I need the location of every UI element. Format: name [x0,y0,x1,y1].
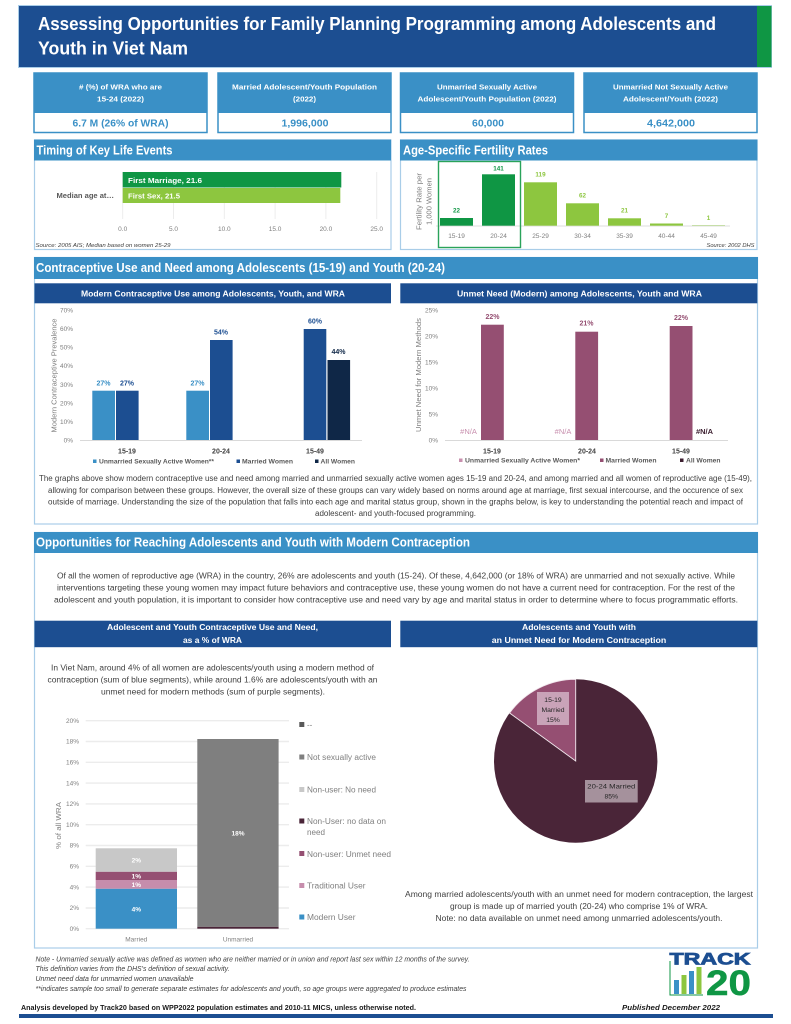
bar chart: fertility rates: 35-39 [616,233,633,240]
label: 15-19 married: Married [541,707,565,714]
panel: timing of key life events [34,140,391,250]
legend: stacked chart: Non-user: Unmet need [307,850,391,859]
chart: modern contraceptive use: Married Women [242,458,293,466]
chart: stacked use and need as % of WRA: contraception (sum of blue segments), while around 1.6% are adolescents/youth with an [48,676,378,684]
chart: modern contraceptive use: Modern Contraceptive Prevalence [50,319,58,432]
chart: modern contraceptive use: 60% [60,326,73,333]
chart: modern contraceptive use: 70% [60,308,73,314]
chart: unmet need [400,283,757,464]
chart: stacked use and need as % of WRA: 12% [66,801,79,808]
text block: graph explanation: allowing for comparison between these groups. However, the overall size of these groups can vary widely based on norms around age at marriage, first sexual intercourse, and the occurence of sex [48,486,743,495]
bar chart: fertility rates: 21 [621,208,628,214]
legend: stacked chart: need [307,828,325,837]
stat card: unmarried not sexually active [584,73,757,132]
chart: unmet need pie: Among married adolescents/youth with an unmet need for modern contraception, the largest [405,890,754,899]
text block: opportunities intro: interventions targeting these young women may impact future behaviors and contraceptive use, these young women do not have a current need for contraception. For the rest of the [57,584,736,592]
chart: unmet need: #N/A [555,427,571,436]
footnotes [36,956,470,993]
label: 15-19 married: 15% [546,717,560,724]
bar chart: median age: First Sex, 21.5 [128,192,181,200]
chart: unmet need: #N/A [460,427,477,436]
chart: modern contraceptive use: 15-49 [306,448,324,456]
chart: modern contraceptive use: Modern Contraceptive Use among Adolescents, Youth, and WRA [81,290,345,298]
legend: stacked chart: -- [307,720,313,730]
stat card: unmarried sexually active: Unmarried Sexually Active [437,82,537,92]
chart: modern contraceptive use: 0% [64,438,73,444]
label: 15-19 married: 15-19 [544,697,562,704]
logo: Track20 [670,950,751,1003]
chart: unmet need: 21% [579,320,594,328]
chart: stacked use and need as % of WRA: 16% [66,760,79,766]
text block: opportunities intro [54,572,738,604]
chart: unmet need pie: Note: no data available on unmet need among unmarried adolescents/youth. [436,914,722,923]
title banner [18,6,772,68]
bar chart: median age: Median age at… [56,191,114,200]
chart: unmet need: 0% [429,438,438,444]
bar chart: fertility rates: Fertility Rate per [416,172,424,230]
stat card: married population: (2022) [293,94,316,104]
chart: stacked use and need as % of WRA: In Viet Nam, around 4% of all women are adolescents/youth using a modern method of [51,664,375,672]
chart: modern contraceptive use: 40% [60,363,73,370]
text block: graph explanation: outside of marriage. Understanding the size of the population that falls into each age and marital status group, shown in the graphs below, is key to understanding the potential reach and impact of [48,498,744,506]
footnotes: This definition varies from the DHS's definition of sexual activity. [36,966,230,973]
chart: unmet need pie: group is made up of married youth (20-24) who comprise 1% of WRA. [450,902,708,911]
chart: stacked use and need as % of WRA: 2% [70,905,79,912]
bar chart: fertility rates: 62 [579,192,586,200]
bar chart: fertility rates: 1 [707,215,711,222]
bar chart: median age [56,172,383,233]
chart: unmet need: Unmarried Sexually Active Women* [465,458,580,464]
stat card: married population: 1,996,000 [282,118,329,130]
source note: Source: 2002 DHS [706,243,755,249]
chart: unmet need: 15-49 [672,448,690,456]
bar chart: fertility rates: 141 [493,166,504,172]
chart: stacked use and need as % of WRA: 14% [66,780,79,787]
bar chart: fertility rates: 20-24 [490,233,507,240]
bar chart: median age: First Marriage, 21.6 [128,176,202,185]
chart: stacked use and need as % of WRA [34,621,391,944]
panel: age-specific fertility rates [400,140,758,250]
chart: modern contraceptive use: 27% [96,380,111,388]
bar chart: fertility rates: 15-19 [448,233,465,240]
chart: unmet need: 22% [485,314,500,321]
heading: timing of key life events: Timing of Key Life Events [36,144,173,158]
stat card: married population: Married Adolescent/Youth Population [232,82,377,92]
bar chart: median age: 10.0 [218,226,231,233]
chart: unmet need: 25% [425,308,438,314]
chart: stacked use and need as % of WRA: % of all WRA [54,802,63,849]
footer bar [19,1014,773,1018]
chart: stacked use and need as % of WRA: 1% [132,874,141,880]
chart: modern contraceptive use: 27% [190,380,205,388]
title banner: Assessing Opportunities for Family Planning Programming among Adolescents and [38,13,716,34]
chart: modern contraceptive use: All Women [320,458,355,466]
legend: stacked chart: Non-user: No need [307,786,376,794]
bar chart: median age: 0.0 [118,226,128,233]
chart: stacked use and need as % of WRA: 1% [132,882,141,889]
stat card: unmarried sexually active: Adolescent/Youth Population (2022) [418,94,557,104]
chart: unmet need: All Women [686,458,721,464]
analysis credit: Analysis developed by Track20 based on WPP2022 population estimates and 2010-11 MICS, unless otherwise noted. [21,1003,416,1012]
stat card: unmarried not sexually active: 4,642,000 [647,118,695,130]
text block: opportunities intro: Of all the women of reproductive age (WRA) in the country, 26% are adolescents and youth (15-24). Of these, 4,642,000 (or 18% of WRA) are unmarried and not sexually active. While [57,572,736,580]
bar chart: fertility rates: 30-34 [574,233,591,240]
legend: stacked chart: Not sexually active [307,753,377,762]
heading: contraceptive use and need: Contraceptive Use and Need among Adolescents (15-19) and Youth (20-24) [36,261,445,275]
bar chart: fertility rates: 40-44 [658,233,675,240]
stat card: WRA 15-24: 15-24 (2022) [97,94,145,104]
bar chart: fertility rates: 119 [535,172,546,178]
chart: modern contraceptive use [34,283,391,466]
chart: modern contraceptive use: 30% [60,382,73,389]
chart: stacked use and need as % of WRA: Married [125,936,148,944]
chart: stacked use and need as % of WRA: 18% [66,739,79,746]
chart: modern contraceptive use: 10% [60,419,73,426]
chart: modern contraceptive use: 50% [60,345,73,352]
stat card: unmarried not sexually active: Adolescent/Youth (2022) [623,94,718,104]
chart: unmet need: 10% [425,386,438,392]
chart: stacked use and need as % of WRA: Adolescent and Youth Contraceptive Use and Need, [107,623,318,632]
text block: graph explanation [39,474,752,518]
bar chart: fertility rates: 25-29 [532,233,549,240]
chart: stacked use and need as % of WRA: as a % of WRA [183,636,242,645]
bar chart: median age: 15.0 [269,226,282,233]
chart: unmet need pie: an Unmet Need for Modern Contraception [492,636,666,645]
chart: unmet need: 22% [674,315,689,322]
label: 20-24 married: 85% [604,794,618,800]
chart: unmet need: Married Women [606,458,657,464]
chart: stacked use and need as % of WRA: 20% [66,718,79,725]
legend: stacked chart: Non-User: no data on [307,817,386,826]
chart: stacked use and need as % of WRA: 4% [132,906,141,914]
logo: Track20: TRACK [670,950,751,968]
chart: unmet need: 15-19 [483,448,501,456]
chart: stacked use and need as % of WRA: 4% [70,884,79,891]
chart: unmet need: Unmet Need for Modern Methods [414,318,423,432]
legend: stacked chart: Modern User [307,913,356,922]
heading: age-specific fertility rates: Age-Specific Fertility Rates [403,144,548,158]
chart: unmet need: 20% [425,334,438,340]
stat card: unmarried sexually active [400,73,574,132]
chart: stacked use and need as % of WRA: 18% [231,830,245,838]
publication date: Published December 2022 [622,1003,721,1012]
label: 20-24 married [585,780,638,802]
text block: graph explanation: adolescent- and youth-focused programming. [315,509,476,518]
panel: opportunities for reaching adolescents and youth [34,532,758,948]
footnotes: Note - Unmarried sexually active was defined as women who are neither married or in union and report last sex within 12 months of the survey. [36,956,470,964]
chart: modern contraceptive use: 44% [331,349,346,356]
chart: unmet need: 5% [429,412,438,418]
chart: unmet need: #N/A [696,427,714,436]
chart: unmet need: 15% [425,360,438,366]
chart: modern contraceptive use: 20% [60,400,73,407]
title banner: Youth in Viet Nam [38,38,188,58]
chart: stacked use and need as % of WRA: unmet need for modern methods (sum of purple segments). [101,688,325,696]
chart: modern contraceptive use: 20-24 [212,448,230,456]
text block: opportunities intro: adolescent and youth population, it is important to consider how contraceptive use and need vary by age and marital status in order to determine where to focus programmatic efforts. [54,596,738,604]
bar chart: median age: 5.0 [169,226,178,233]
chart: modern contraceptive use: 54% [214,330,229,336]
legend: stacked chart [299,720,391,922]
footnotes: Unmet need data for unmarried women unavailable [36,976,194,983]
chart: modern contraceptive use: 27% [120,380,135,388]
label: 20-24 married: 20-24 Married [587,784,636,790]
chart: modern contraceptive use: 60% [308,318,323,326]
stat card: WRA 15-24 [34,73,207,132]
bar chart: fertility rates [416,162,730,248]
bar chart: fertility rates: 22 [453,208,460,214]
stat card: married population [218,73,391,132]
bar chart: fertility rates: 1,000 Women [426,178,434,225]
bar chart: median age: 25.0 [370,226,383,233]
chart: modern contraceptive use: 15-19 [118,448,136,456]
stat card: unmarried not sexually active: Unmarried Not Sexually Active [613,82,728,92]
panel: contraceptive use and need [34,257,758,524]
bar chart: fertility rates: 7 [665,213,669,220]
chart: stacked use and need as % of WRA: 2% [132,858,141,864]
chart: unmet need pie [400,621,757,923]
legend: stacked chart: Traditional User [307,882,366,890]
chart: unmet need: 20-24 [578,448,596,456]
footnotes: **indicates sample too small to generate separate estimates for adolescents and youth, so age groups were aggregated to produce estimates [36,986,467,993]
chart: stacked use and need as % of WRA: 6% [70,864,79,870]
chart: stacked use and need as % of WRA: 10% [66,822,79,829]
stat card: unmarried sexually active: 60,000 [472,118,504,130]
text block: graph explanation: The graphs above show modern contraceptive use and need among married and unmarried sexually active women ages 15-19 and 20-24, and among married and all women of reproductive age (15-49), [39,474,752,483]
chart: stacked use and need as % of WRA: 8% [70,843,79,850]
label: 15-19 married [537,692,569,725]
bar chart: fertility rates: 45-49 [700,233,717,240]
logo: Track20: 20 [706,964,751,1003]
source note: Source: 2005 AIS; Median based on women 25-29 [36,243,170,249]
stat card: WRA 15-24: 6.7 M (26% of WRA) [72,118,168,130]
chart: stacked use and need as % of WRA: Unmarried [223,936,254,944]
heading: opportunities: Opportunities for Reaching Adolescents and Youth with Modern Contraception [36,536,470,550]
chart: stacked use and need as % of WRA: 0% [70,926,79,933]
stat card: WRA 15-24: # (%) of WRA who are [79,82,162,92]
chart: unmet need: Unmet Need (Modern) among Adolescents, Youth and WRA [457,290,702,298]
chart: unmet need pie: Adolescents and Youth with [522,623,636,632]
chart: modern contraceptive use: Unmarried Sexually Active Women** [99,458,214,466]
bar chart: median age: 20.0 [320,226,333,233]
